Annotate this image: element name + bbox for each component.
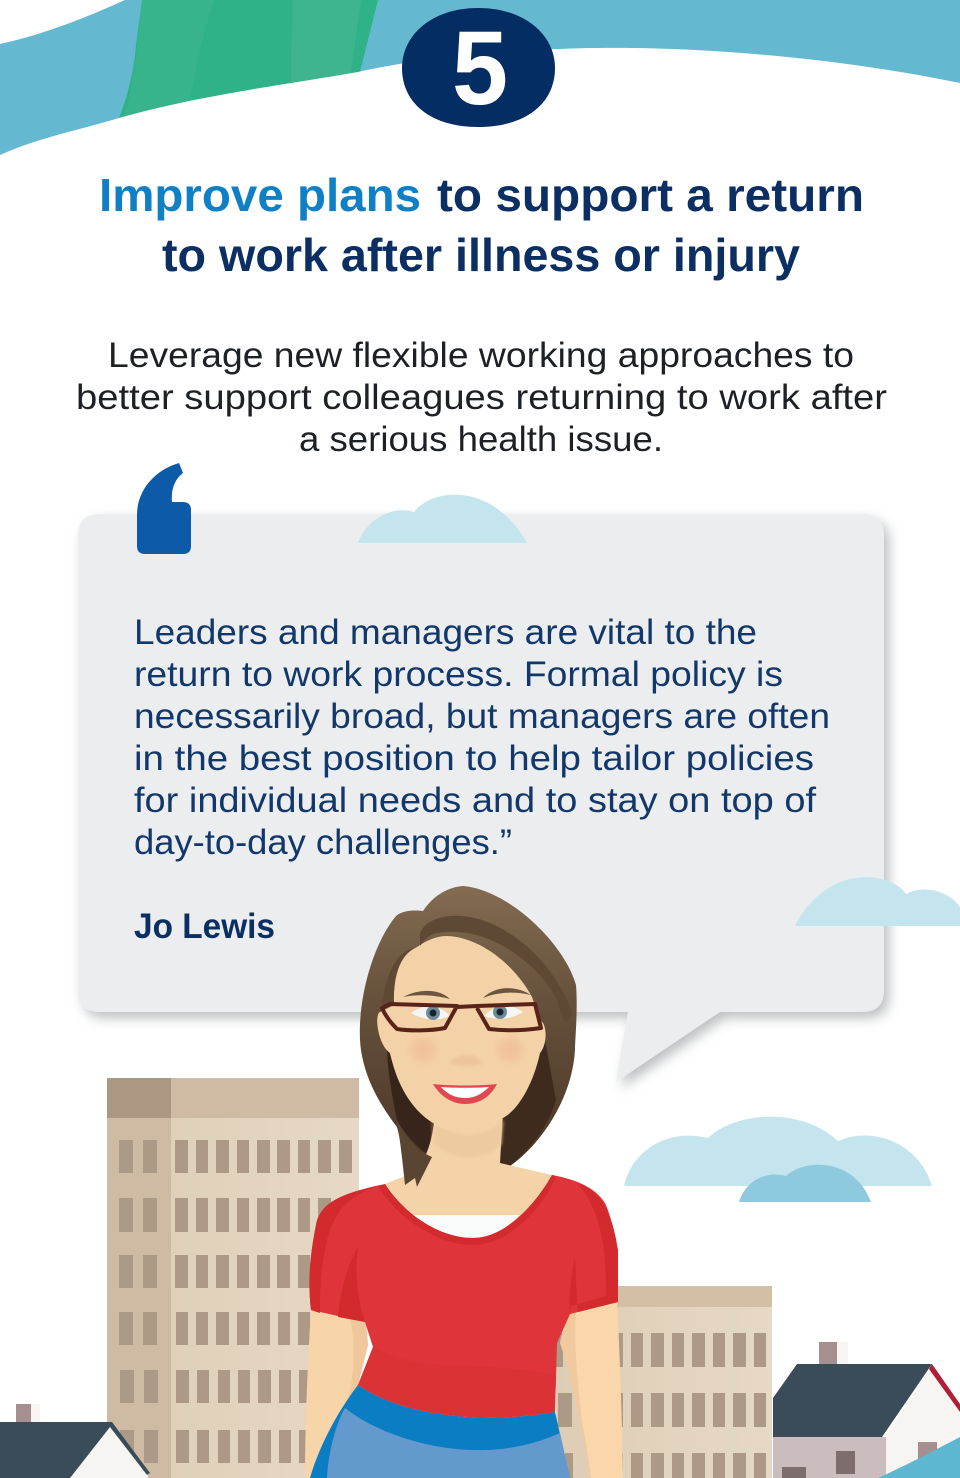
eyes (411, 1005, 523, 1020)
top wave banner (0, 0, 960, 162)
glasses (382, 1004, 541, 1030)
title: to work after illness or injury (162, 229, 800, 281)
quotation mark icon (137, 463, 191, 554)
corner wave (878, 1437, 960, 1478)
hair left strand shade (382, 947, 417, 1005)
quote text: day-to-day challenges.” (134, 823, 512, 862)
quote text: for individual needs and to stay on top of (134, 781, 816, 820)
quote text: necessarily broad, but managers are often (134, 697, 830, 736)
hair shadow (387, 1050, 432, 1157)
woman illustration (305, 886, 623, 1478)
red shirt (309, 1175, 618, 1418)
intro text: better support colleagues returning to work after (76, 378, 887, 417)
shirt shading (309, 1175, 618, 1322)
blush (410, 1038, 523, 1062)
hair front strand (397, 1120, 432, 1187)
title (99, 169, 864, 281)
intro text: a serious health issue. (299, 420, 663, 459)
quote text (134, 613, 830, 862)
speech bubble (78, 514, 884, 1082)
cloud: large lower right (624, 1117, 932, 1186)
building: short right (550, 1286, 772, 1478)
hair back (360, 886, 577, 1187)
building: tall left (107, 1078, 359, 1478)
quote text: return to work process. Formal policy is (134, 655, 783, 694)
face (377, 936, 546, 1132)
intro text (76, 336, 887, 459)
quote text: Leaders and managers are vital to the (134, 613, 757, 652)
number badge: 5 (452, 10, 508, 127)
neck and chest (385, 1110, 552, 1238)
cloud: on bubble right (795, 877, 960, 926)
intro text: Leverage new flexible working approaches to (108, 336, 854, 375)
title: to support a return (437, 169, 864, 221)
cloud: small lower right (739, 1165, 871, 1202)
title: Improve plans (99, 169, 421, 221)
right arm (560, 1298, 623, 1478)
number badge (402, 8, 555, 127)
house: left (0, 1404, 150, 1478)
cloud: on bubble top (358, 495, 527, 543)
white undershirt (413, 1215, 520, 1238)
left arm (305, 1308, 368, 1478)
quote text: in the best position to help tailor policies (134, 739, 814, 778)
eyebrows (403, 988, 531, 999)
skirt (310, 1385, 570, 1478)
mouth (433, 1084, 497, 1104)
nose (449, 1055, 484, 1066)
attribution: Jo Lewis: Jo Lewis (134, 907, 275, 946)
house: right (773, 1342, 960, 1478)
hair fringe shade (420, 916, 572, 1021)
